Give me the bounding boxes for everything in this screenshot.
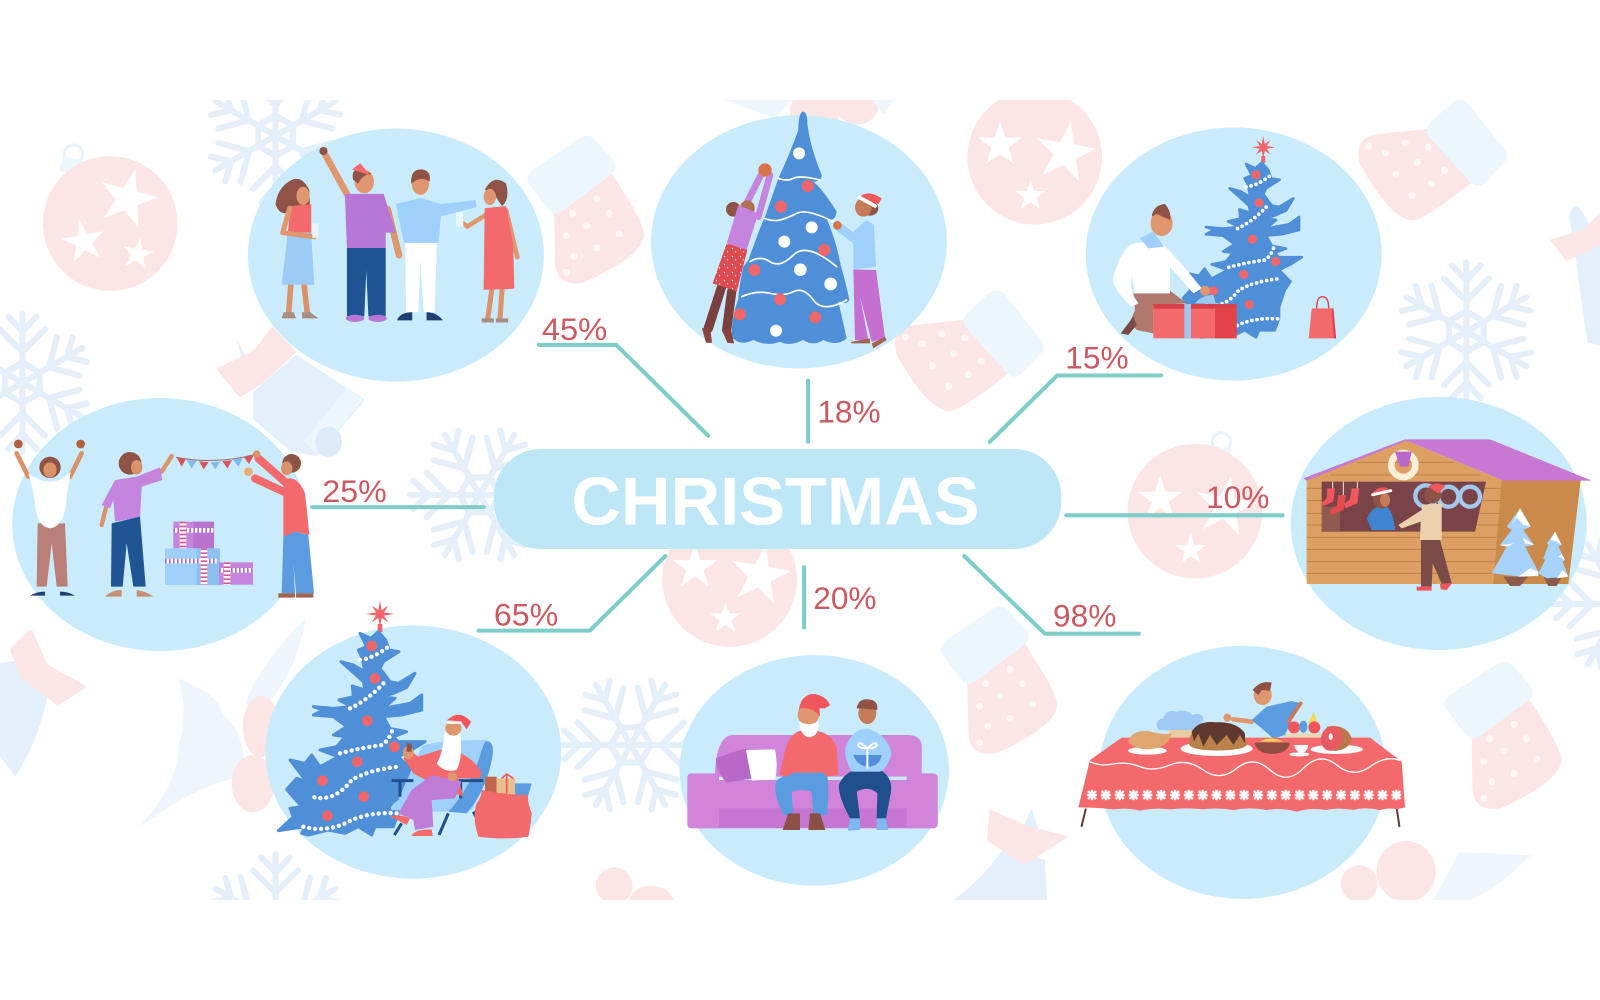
drawing layer bbox=[14, 440, 314, 598]
stocking: lower right bbox=[1455, 671, 1561, 809]
label: 25%: 25% bbox=[322, 473, 387, 509]
holly: top centre bbox=[725, 100, 894, 124]
garland of flags bbox=[176, 454, 257, 469]
scene: family hanging garland bbox=[12, 398, 314, 651]
person: cook in blue shirt bbox=[1223, 682, 1302, 738]
connector: santa tree 65% bbox=[479, 556, 665, 631]
person: man in red sweater bbox=[244, 450, 314, 598]
gift sack bbox=[475, 774, 532, 838]
drawing layer bbox=[278, 601, 532, 838]
gift box bbox=[1153, 295, 1237, 338]
person: woman with sparklers bbox=[14, 440, 85, 596]
stall wooden front bbox=[1307, 440, 1581, 584]
santa seated bbox=[775, 694, 838, 830]
bell: left edge bbox=[0, 632, 84, 777]
bauble: top left bbox=[43, 145, 178, 291]
stocking: centre bbox=[892, 298, 1038, 415]
gift boxes bbox=[165, 522, 253, 585]
shopping bag bbox=[1309, 297, 1336, 338]
drawing layer bbox=[702, 112, 887, 348]
label: 15%: 15% bbox=[1065, 339, 1129, 375]
background pattern band bbox=[0, 100, 1600, 900]
snowy trees bbox=[1492, 508, 1568, 586]
snowflake: top left bbox=[208, 100, 343, 205]
drawing layer bbox=[1303, 439, 1592, 591]
drawing layer bbox=[687, 694, 938, 831]
person: customer bbox=[1398, 483, 1453, 591]
scene: couple decorating tree bbox=[651, 112, 947, 368]
connector: sofa 20% bbox=[802, 567, 806, 628]
snowflake: lower centre bbox=[560, 677, 687, 812]
bell: upper left bbox=[219, 330, 363, 457]
chocolate cake bbox=[1181, 722, 1253, 756]
blue wreaths bbox=[1415, 485, 1480, 507]
hanging stockings bbox=[1322, 482, 1359, 515]
person: seller bbox=[1367, 487, 1395, 530]
snowflake: lower right edge bbox=[1551, 537, 1600, 671]
person: woman reaching up bbox=[702, 163, 772, 343]
spruce tree with star bbox=[1176, 136, 1302, 337]
holly: bottom right bbox=[1341, 841, 1531, 902]
purple sofa bbox=[687, 735, 938, 828]
connector: gifts 15% bbox=[990, 376, 1161, 442]
scene: friends toasting at party bbox=[248, 129, 544, 382]
holly: bottom centre bbox=[596, 868, 674, 900]
label: 45%: 45% bbox=[542, 311, 607, 347]
label: 20%: 20% bbox=[813, 580, 877, 616]
label: 98%: 98% bbox=[1053, 598, 1116, 634]
person: man in purple shirt with sparkler bbox=[319, 147, 399, 322]
stocking: top right bbox=[1355, 107, 1502, 225]
connector: garland 25% bbox=[312, 505, 484, 509]
fruit bowl bbox=[1285, 712, 1322, 746]
person: woman in red dress bbox=[456, 180, 517, 322]
bowl of salad bbox=[1254, 738, 1290, 754]
connector: party 45% bbox=[539, 345, 708, 436]
scene: christmas market stall bbox=[1291, 397, 1592, 650]
snowflake: right bbox=[1395, 262, 1538, 401]
bell: right edge bbox=[1550, 206, 1600, 345]
bauble: behind title bbox=[662, 549, 797, 647]
bauble: top centre right bbox=[967, 90, 1102, 224]
connector: dinner 98% bbox=[964, 556, 1139, 634]
bell: bottom bbox=[953, 808, 1065, 900]
snowflake: left bbox=[0, 313, 94, 452]
roast turkey bbox=[1128, 731, 1172, 755]
snowflake: bottom bbox=[210, 851, 341, 900]
person: man in blue shirt bbox=[396, 169, 477, 320]
label: 10%: 10% bbox=[1206, 479, 1269, 515]
santa bbox=[390, 715, 482, 836]
red table cloth bbox=[1078, 738, 1405, 826]
scene: man wrapping gifts by tree bbox=[1086, 128, 1382, 381]
bauble: right of centre bbox=[1128, 433, 1262, 579]
title text: CHRISTMAS bbox=[571, 464, 980, 539]
armchair bbox=[391, 740, 493, 835]
person: kneeling man in white sweater bbox=[1113, 204, 1210, 335]
decorated tree bbox=[732, 112, 849, 344]
label: 65%: 65% bbox=[494, 597, 558, 633]
greens in box bbox=[1157, 711, 1203, 744]
drawing layer bbox=[1113, 136, 1336, 338]
stocking: top centre left bbox=[538, 146, 644, 284]
label: 18%: 18% bbox=[817, 393, 881, 429]
scene: festive dinner table bbox=[1078, 646, 1405, 899]
drawing layer bbox=[1078, 682, 1405, 826]
person: woman in blue skirt bbox=[276, 179, 318, 318]
scene: santa by the tree bbox=[265, 601, 561, 879]
person: man in santa hat bbox=[833, 193, 887, 348]
stall purple roof bbox=[1303, 439, 1592, 481]
snowflake: behind title bbox=[407, 427, 528, 562]
ham on plate bbox=[1311, 723, 1363, 754]
cushions bbox=[716, 748, 777, 783]
stocking: lower centre bbox=[951, 616, 1057, 754]
connector: market 10% bbox=[1066, 513, 1283, 517]
connector: tree 18% bbox=[806, 381, 810, 442]
boy seated with gift bbox=[839, 699, 892, 831]
person: woman in purple top bbox=[102, 452, 172, 597]
wreath bbox=[1391, 452, 1415, 477]
holly: lower left bbox=[138, 617, 306, 829]
cup bbox=[1289, 745, 1309, 756]
spruce tree with star bbox=[278, 601, 425, 835]
title pill bbox=[494, 449, 1061, 549]
scene: santa and boy on sofa bbox=[680, 655, 949, 886]
